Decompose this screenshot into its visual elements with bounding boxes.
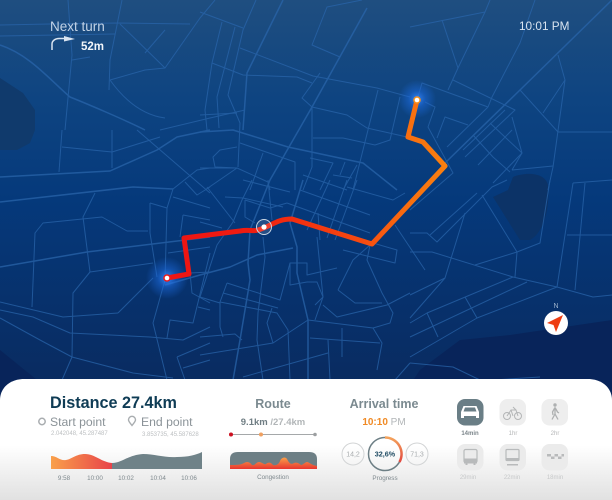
congestion chart xyxy=(230,452,317,469)
progress gauges: 71,3 xyxy=(410,452,424,458)
chart time labels: 10:02 xyxy=(118,475,134,482)
transport: car: 14min xyxy=(461,431,479,437)
dark water areas xyxy=(0,78,612,400)
progress label: Progress xyxy=(372,475,398,482)
bottom panel xyxy=(0,379,612,500)
congestion label: Congestion xyxy=(257,474,289,481)
transport: walking xyxy=(542,399,568,437)
transport: bicycle: 1hr xyxy=(509,431,517,437)
arrival heading: Arrival time xyxy=(350,397,418,411)
start point: 2.042048, 45.287487 xyxy=(51,431,108,437)
end point: 3.853735, 45.587628 xyxy=(142,432,199,438)
elevation chart xyxy=(51,452,202,469)
street network xyxy=(0,0,612,380)
progress gauges: 14,2 xyxy=(346,452,360,458)
transport: tram xyxy=(500,444,526,481)
transport: bicycle xyxy=(500,399,526,437)
end point marker xyxy=(413,96,421,104)
route line xyxy=(167,100,445,278)
start point: Start point xyxy=(50,415,106,429)
next turn distance: 52m xyxy=(81,41,104,53)
arrival value: 10:10 PM xyxy=(362,417,406,428)
transport: walking: 2hr xyxy=(551,431,559,437)
chart time labels: 10:00 xyxy=(87,475,103,482)
compass: N xyxy=(553,303,559,310)
route progress bar xyxy=(229,432,317,436)
end point xyxy=(128,415,199,438)
transport: taxi: 18min xyxy=(547,475,563,481)
progress gauges xyxy=(342,437,428,470)
glow: route end xyxy=(398,80,436,118)
glow: route start xyxy=(146,257,188,299)
transport: tram: 22min xyxy=(504,475,520,481)
transport: car xyxy=(457,399,484,437)
end point: End point xyxy=(141,415,193,429)
chart time labels: 9:58 xyxy=(58,475,71,482)
route heading: Route xyxy=(255,397,291,411)
transport: taxi xyxy=(542,444,568,481)
icon: turn arrow xyxy=(52,36,75,50)
map background xyxy=(0,0,612,400)
chart time labels: 10:06 xyxy=(181,475,197,482)
route distance: 9.1km /27.4km xyxy=(241,417,305,428)
clock: 10:01 PM xyxy=(519,19,570,33)
transport: bus xyxy=(457,444,484,481)
next turn label: Next turn xyxy=(50,19,105,34)
distance heading: Distance 27.4km xyxy=(50,394,177,412)
start point marker xyxy=(163,274,171,282)
transport: bus: 29min xyxy=(460,475,476,481)
chart time labels xyxy=(58,475,197,482)
chart time labels: 10:04 xyxy=(150,475,166,482)
current position marker xyxy=(256,220,272,234)
compass xyxy=(544,303,568,335)
progress gauges: 32,6% xyxy=(375,450,396,458)
start point xyxy=(39,415,108,437)
